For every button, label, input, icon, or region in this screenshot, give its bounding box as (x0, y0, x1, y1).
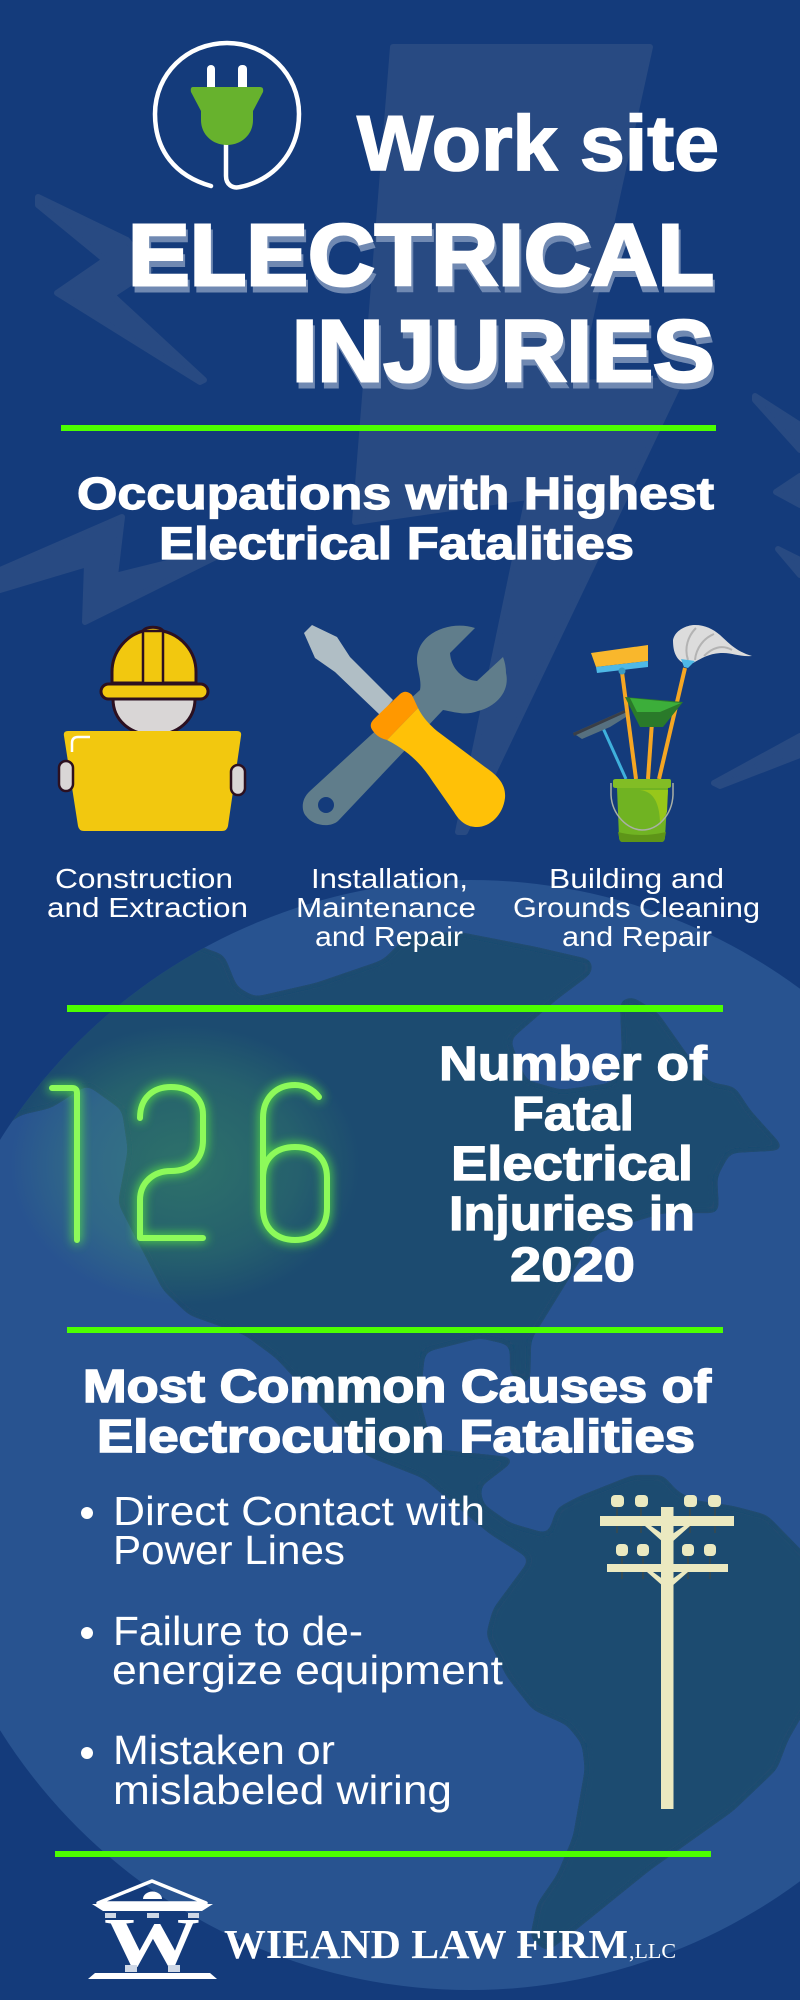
logo: firm name: ,LLC (629, 1939, 676, 1963)
label: building and grounds cleaning and repair: Building and (549, 863, 724, 894)
title shadow: INJURIES (294, 309, 716, 406)
title: Electrical Injuries: ELECTRICAL (128, 207, 714, 304)
logo: law firm pillars and W (88, 1881, 217, 1982)
list: causes: mislabeled wiring (113, 1767, 452, 1813)
icon: wrench and screwdriver (303, 625, 507, 827)
heading: number of fatal electrical injuries in 2020: Electrical (451, 1138, 693, 1191)
icon: construction worker with blueprint (59, 627, 245, 831)
list: causes: Mistaken or (113, 1727, 335, 1773)
list: causes: Power Lines (113, 1527, 345, 1573)
label: building and grounds cleaning and repair: Grounds Cleaning (513, 892, 760, 923)
title: Electrical Injuries: INJURIES (292, 303, 714, 400)
title shadow (130, 213, 716, 406)
heading: number of fatal electrical injuries in 2020: Fatal (512, 1088, 634, 1141)
title: Work site: Work site (357, 99, 719, 187)
neon number 126 (10, 1025, 360, 1305)
list: causes: energize equipment (112, 1647, 504, 1693)
heading: occupations: Electrical Fatalities (159, 518, 634, 569)
divider (67, 1005, 723, 1012)
heading: occupations (77, 468, 714, 569)
divider (61, 425, 716, 431)
icon: utility pole (600, 1495, 734, 1809)
heading: occupations: Occupations with Highest (77, 468, 714, 519)
label: installation, maintenance and repair: Installation, (311, 863, 468, 894)
list: causes (81, 1488, 504, 1813)
list: causes: Failure to de- (113, 1608, 363, 1654)
label: construction and extraction (47, 863, 248, 923)
icon: electric plug (155, 43, 299, 187)
title: Electrical Injuries (128, 207, 714, 400)
logo: firm name: WIEAND LAW FIRM (224, 1921, 628, 1967)
heading: number of fatal electrical injuries in 2020 (439, 1038, 708, 1292)
label: construction and extraction: and Extraction (47, 892, 248, 923)
heading: most common causes (83, 1360, 712, 1462)
list: causes: Direct Contact with (113, 1488, 485, 1534)
logo: law firm pillars and W: W (104, 1905, 200, 1982)
background globe (0, 880, 800, 1990)
label: building and grounds cleaning and repair: and Repair (562, 921, 712, 952)
icon: cleaning tools in bucket (573, 625, 752, 842)
heading: number of fatal electrical injuries in 2020: Number of (439, 1038, 708, 1091)
label: installation, maintenance and repair: and Repair (315, 921, 463, 952)
heading: most common causes: Electrocution Fatalities (97, 1410, 695, 1462)
label: construction and extraction: Construction (55, 863, 233, 894)
heading: number of fatal electrical injuries in 2020: 2020 (510, 1239, 635, 1292)
label: building and grounds cleaning and repair (513, 863, 760, 952)
divider (67, 1327, 723, 1333)
background lightning bolts (0, 47, 800, 832)
heading: number of fatal electrical injuries in 2020: Injuries in (449, 1188, 695, 1241)
divider (55, 1851, 711, 1857)
title shadow: ELECTRICAL (130, 213, 716, 310)
label: installation, maintenance and repair: Maintenance (296, 892, 476, 923)
label: installation, maintenance and repair (296, 863, 476, 952)
heading: most common causes: Most Common Causes of (83, 1360, 712, 1412)
